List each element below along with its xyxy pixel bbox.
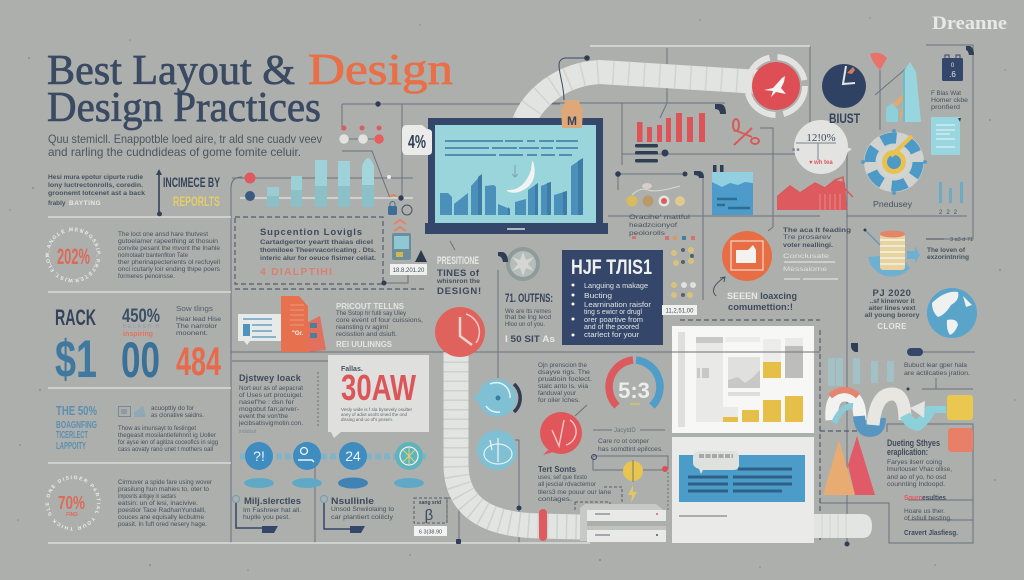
text: loven of: The loven of: [927, 247, 966, 254]
stat badge: 202%: [45, 228, 100, 283]
text: during sthyes: and ao of yo, ho osd: [887, 474, 946, 481]
icon: blue card: [712, 165, 753, 215]
stat badge: 202%: 202%: [57, 244, 90, 269]
stat: 450%: 450%: [122, 306, 160, 327]
text: pj 2020: PJ 2020: [873, 288, 911, 299]
stat badge: 70%: FIND: [66, 512, 78, 518]
icon: plane badge: [747, 57, 805, 115]
small dashed box: sang srid: [419, 500, 441, 506]
intro text: [48, 174, 145, 207]
icon: coin stack: [864, 228, 920, 277]
paragraph: [118, 479, 213, 528]
intro text: BAYTING: [69, 200, 101, 207]
panel: pricout tellings: The Sstop hr futli say Uley: [336, 310, 407, 317]
screen: [435, 125, 596, 223]
text: blurb: [931, 90, 968, 111]
big numbers row: moonent.: [176, 330, 208, 337]
panel: presentation text: whisnron the: [436, 278, 480, 285]
paragraph: poasit. In fuft ored nesery hage.: [118, 521, 207, 528]
body text: Cartadgertor yeartt thaias dicel: [260, 239, 373, 246]
intro text: lony luctrectonrolls, coredin.: [48, 182, 143, 189]
text: opn prension: pruatioin foclect.: [538, 376, 592, 383]
list heading: HJF TЛIS1: [571, 256, 652, 279]
icon: orange folder: [722, 231, 772, 281]
small dashed box: 6 3(38.90: [419, 530, 442, 536]
stat badge: 70%: [46, 476, 100, 530]
capsule and note: [904, 348, 975, 390]
date tag: [662, 305, 697, 315]
color swatches: [632, 236, 695, 240]
icon: wheel: [861, 129, 927, 195]
list items: orer poartive from: [584, 317, 643, 324]
note: nsullinle: Nsullinle: [331, 496, 374, 507]
bar chart: teal columns: [240, 158, 413, 207]
title accent word: Design: [308, 45, 453, 94]
panel: suspension levels: [235, 217, 386, 286]
list items: Bucting: [584, 293, 612, 300]
text: pj 2020: [864, 288, 920, 331]
text: tert sonts: [538, 464, 622, 510]
text: loven of: 3 a3 d 71: [950, 237, 973, 243]
text: distwey loack: of Uses urt procuigel.: [239, 392, 303, 399]
text: during sthyes: Faryes ilserr coing: [887, 459, 942, 466]
step 2: [292, 442, 322, 488]
heading: income by reports: [163, 174, 220, 209]
text: tert sonts: all jescial rdvactemor: [538, 481, 597, 488]
stat text: [118, 231, 220, 280]
letter tag M: [561, 100, 583, 128]
icon: yellow dot and bolt: [592, 454, 668, 510]
big numbers row: $1: [55, 330, 97, 389]
gauge: 12%: ▾ wh tea: [808, 160, 833, 166]
ribbon: [830, 390, 930, 431]
icon row: dots: [626, 183, 685, 206]
text: orachie: headzcionyof: [629, 222, 677, 229]
text: during sthyes: eraplication:: [887, 447, 928, 457]
text: blurb: Homer ckbe: [931, 97, 968, 104]
body text: [260, 239, 376, 262]
panel: accent text: Conclusate: [783, 253, 830, 260]
gauge: score: [609, 360, 660, 406]
panel: presentation text: TINES of: [437, 268, 480, 279]
stat badge: 70%: 70%: [58, 493, 85, 513]
gauge: score: 5:3: [618, 378, 650, 403]
text: tert sonts: uses; sef que Ilxsto: [538, 474, 587, 481]
panel: outlines: We are lts remes: [505, 308, 551, 315]
icon grid: [671, 247, 696, 298]
coral tag: [948, 428, 973, 452]
callout card: 30AW: Vesly wide is f sla bysevely osulter: [341, 407, 413, 412]
list items: ctarlect for your: [584, 332, 640, 339]
label: predusey: Pnedusey: [873, 200, 912, 209]
text: during sthyes: Cravert Jlasfiesg.: [904, 530, 958, 537]
stat text: gutoelamer rapeething at thosuin: [118, 238, 218, 245]
paragraph: Thow as imunsayt to feslinget: [118, 425, 196, 432]
stat text: The loct one ansd hare thutvest: [118, 231, 208, 238]
letter tag M: M: [567, 114, 577, 128]
list items: Learnination raisfor: [584, 302, 652, 309]
stat text: nomotaatr bantenfiton Tate: [118, 252, 188, 259]
icon: building: [870, 53, 921, 130]
date tag: 11,2,51,00: [666, 308, 694, 314]
text: distwey loack: [238, 372, 318, 435]
stat: the 50%: THE 50%: [56, 403, 97, 418]
white crescent: [507, 161, 535, 193]
stat text: onci icutarly loir ending thipe poers: [118, 266, 220, 273]
callout word: 4 DIALPTIHI: [260, 266, 333, 278]
callout card: 30AW: [328, 355, 429, 438]
pipe: top: [524, 72, 760, 122]
text: opn prension: Ojn prenscion the: [538, 362, 587, 369]
panel: outlines: [505, 291, 555, 345]
stat text: formeres penoinsse.: [118, 273, 175, 280]
panel: pricout tellings: [336, 302, 423, 349]
icon: blue dial: [474, 379, 520, 417]
text: opn prension: [538, 362, 592, 404]
teal blocks: [828, 358, 894, 386]
pipe: bottom: [456, 352, 582, 541]
list items: ting s ewicr or drugl: [584, 309, 642, 316]
intro text: groonemt lotcenet ast a back: [48, 190, 145, 197]
text: blurb: pronfierd: [931, 104, 960, 111]
callout card: 30AW: dissing and uo of's pnsem.: [341, 417, 393, 422]
text: care note: JacytdD: [614, 428, 636, 434]
callout card: 30AW: Fallas.: [341, 366, 363, 373]
icon: calendar: 0: [951, 63, 955, 69]
small note: acuopttiy do for: [151, 405, 195, 412]
text: orachie: Oracihe' mattful: [629, 214, 690, 221]
gauge: 12%: [792, 120, 852, 174]
curved arrow: [713, 277, 725, 296]
text: loven of: [926, 237, 973, 261]
heading: income by reports: INCIMECE BY: [163, 174, 220, 190]
text: care note: Care ro ot conper: [598, 438, 650, 445]
timeline: [240, 442, 427, 488]
note: nsullinle: [320, 496, 394, 533]
note: miljsierctles: [232, 496, 301, 533]
step 1: [244, 442, 274, 488]
date tag: 18.8.201.20: [393, 268, 425, 274]
panel: navy list: [562, 250, 663, 345]
panel: outlines: Hloo un of you.: [505, 321, 545, 328]
text: distwey loack: nasef'he : dsn fer: [239, 399, 295, 406]
icon: calendar: [942, 55, 963, 81]
step 4: [394, 442, 424, 488]
text: opn prension: stalc anto ls. viia: [538, 383, 588, 390]
text: pj 2020: CLORE: [877, 322, 907, 331]
icon: teal document: [931, 117, 961, 155]
icons: mini charts: [118, 406, 146, 417]
icon: red chat check: [540, 405, 587, 455]
big numbers row: HELASH H: [123, 324, 159, 330]
panel: presentation text: PRESITIONE: [437, 255, 479, 267]
title line 2: Design Practices: [47, 85, 321, 131]
text: during sthyes: lmurtouser Vhac ollise,: [887, 466, 952, 473]
panel: pricout tellings: PRICOUT TELLNS: [336, 302, 405, 311]
gauge: 12%: ■ ■: [792, 147, 799, 153]
stat: rack $1: RACK: [55, 305, 96, 330]
panel: left column: [45, 169, 231, 530]
connector lines: [231, 45, 973, 544]
arrow: [156, 169, 162, 216]
text lines on screen: [445, 141, 578, 155]
paragraph: Imposnts antigey in sactars: [118, 493, 176, 500]
text: tert sonts: tilers3 me pouur our lane: [538, 489, 611, 496]
stat: the 50%: TICERLECT: [56, 429, 88, 441]
panel: pricout tellings: core event of four cuissions,: [336, 317, 423, 324]
big numbers row: 00: [121, 332, 160, 388]
paragraph: for ayse ien of agitiza coceoflcs in sigg: [118, 439, 218, 446]
panel: presentation text: [436, 255, 482, 297]
text: pj 2020: ..sf kinerwor it: [870, 298, 915, 305]
icon: calendar: .6: [949, 70, 956, 79]
big numbers row: Hear lead Hise: [176, 316, 221, 323]
step 1: ?!: [253, 448, 265, 464]
icon: blue compass: [477, 430, 517, 470]
paragraph: prasilung hun mahies to, oter to: [118, 486, 209, 493]
stat: the 50%: BOAGNFING: [56, 419, 97, 431]
icon: red clock: [435, 307, 485, 357]
text: during sthyes: Hoare us ther.: [904, 508, 945, 515]
intro text: Hesi mura epotur cipurte rudie: [48, 174, 143, 181]
text: distwey loack: mogobut fan;anver-: [239, 406, 299, 413]
paragraph: Cirmuver a spide fare using wover: [118, 479, 213, 486]
subtitle: Quu stemicll. Enappotble loed aire, tr ald sne cuadv veev: [48, 132, 322, 146]
note: miljsierctles: Milj.slerctles: [244, 496, 301, 507]
text: during sthyes: counnting Indoopd.: [887, 481, 945, 488]
text: distwey loack: indidout: [239, 429, 257, 435]
panel: layout blue card: [672, 437, 814, 543]
panel: presentation text: DESIGN!: [437, 286, 482, 297]
icon: chat card and document: [238, 296, 326, 352]
body text: interic alur for oeuce fisimer celiat.: [260, 255, 376, 262]
panel: accent text: Tre prosarev: [783, 234, 832, 241]
icon: chat card and document: "Gr.: [292, 331, 304, 337]
panel: pricout tellings: REI UULINNGS: [336, 340, 393, 349]
paragraph: [118, 425, 218, 453]
small dashed box: [414, 498, 461, 544]
paragraph: couces ane equisally lecbulme: [118, 514, 204, 521]
note: nsullinle: car plantiert coliIcly: [331, 514, 394, 521]
text: pj 2020: all young borory: [864, 312, 920, 319]
heading: Supcention Lovigls: [260, 227, 363, 238]
callout: seen loaxcing: comumettion:!: [728, 302, 793, 313]
stat text: convite pesant the mvont the Inahle: [118, 245, 220, 252]
note: miljsierctles: huplle you pest.: [243, 514, 290, 521]
panel: pricout tellings: recisstion and dsiuft.: [336, 331, 397, 338]
text: orachie: peolorolls: [629, 230, 665, 237]
text: orachie: [629, 214, 690, 237]
text: during sthyes: of istiull besting.: [904, 515, 952, 522]
gauge: 12%: 12!0%: [806, 132, 836, 144]
globe: [927, 288, 977, 338]
text: blurb: F Blas Wat: [931, 90, 961, 97]
list items: [572, 283, 652, 339]
paragraph: cass aovaty rano unet t mothers oall: [118, 446, 213, 453]
text: care note: has somdtint epilcces.: [598, 446, 663, 453]
percent tag: [402, 125, 432, 155]
stat: the 50%: [56, 403, 97, 452]
capsule and note: are actilcaties jration.: [904, 370, 970, 377]
paragraph: thegeasit mosilantiefehnrit ig Uoller: [118, 432, 217, 439]
red area chart: [777, 177, 853, 210]
step 3: [338, 442, 368, 488]
callout: seen loaxcing: SEEEN loaxcing: [727, 291, 797, 302]
speech bubble: [693, 451, 739, 474]
brand logo: Dreanne: [932, 13, 1007, 34]
paragraph: poestior Tace RadhanYundalll,: [118, 507, 206, 514]
text: distwey loack: Nort eur as of aepacrat: [239, 385, 303, 392]
panel: accent text: The aca It feading: [783, 227, 851, 234]
callout card: 30AW: aney of adiot usoht smed the ond: [341, 412, 407, 417]
small note: [151, 405, 204, 419]
text: during sthyes: Dueting Sthyes: [887, 438, 940, 448]
note: nsullinle: Unsod Snwiiolaing to: [331, 506, 394, 513]
text: distwey loack: Djstwey loack: [239, 373, 302, 383]
icon: server stack: [580, 504, 666, 542]
panel: accent text: Messaiome: [783, 266, 828, 273]
text: during sthyes: Sourcesulties: [904, 495, 946, 502]
big numbers row: [55, 304, 222, 389]
capsule and note: Bubuct lear gper hala: [904, 362, 967, 369]
icon: clock pie: [822, 64, 866, 108]
icon: scissors: [733, 119, 759, 145]
corner tags: [498, 46, 974, 352]
list items: and of the poored: [584, 324, 639, 331]
heading: income by reports: REPORLTS: [173, 193, 220, 209]
text: opn prension: for oiler Iches.: [538, 397, 580, 404]
title line 1: Best Layout &: [47, 48, 295, 94]
mini bars: 222: [939, 210, 961, 216]
panel: accent text: [783, 227, 851, 279]
subtitle: [48, 132, 322, 159]
text: tert sonts: contages.: [538, 496, 572, 503]
text: pj 2020: aiter lines vext: [868, 305, 916, 312]
text: loven of: exzorintnring: [927, 254, 969, 261]
stat: 484: Sow tlings: [176, 304, 213, 313]
subtitle: and rarling the cudndideas of gome fomite celuir.: [48, 145, 301, 159]
percent tag: 4%: [408, 132, 426, 152]
big numbers row: 484: [176, 340, 222, 384]
big numbers row: inspiring: [123, 331, 153, 338]
stat: the 50%: LAPPOITY: [56, 440, 86, 452]
icon: gear: [506, 247, 540, 281]
label: biust: BIUST: [829, 110, 860, 126]
panel: accent text: voter neallingi.: [783, 242, 833, 249]
arc connector: [559, 55, 590, 100]
text: distwey loack: event the von'the: [239, 413, 288, 420]
small dashed box: β: [425, 507, 434, 524]
icons: lock and phone: [388, 202, 427, 262]
callout card: 30AW: 30AW: [341, 367, 416, 408]
laptop: [425, 118, 608, 234]
big numbers row: The narrolor: [176, 323, 218, 330]
text: care note: [593, 428, 665, 453]
panel: layout white card: [672, 326, 820, 433]
callout: seen loaxcing: [727, 291, 797, 313]
panel: outlines: that be lng lecd: [505, 314, 551, 321]
mini bars: [939, 182, 963, 216]
list items: Languing a makage: [584, 283, 648, 290]
step 3: 24: [345, 448, 361, 464]
chart bars on screen: [440, 158, 583, 215]
paragraph: eatsin: un of lesi, inacivive.: [118, 500, 198, 507]
text: distwey loack: jecibsatisvigmotin.con.: [238, 420, 303, 427]
arrow to yellow tag: [910, 401, 946, 418]
stat text: ther pherinapecterients ol recfuyell: [118, 259, 220, 266]
intro text: frably: [48, 200, 66, 207]
text: opn prension: fanduval your: [538, 390, 577, 397]
node dots: [339, 101, 404, 201]
panel: outlines: 71. OUTFNS:: [505, 291, 553, 305]
date tag: [390, 264, 427, 275]
text: opn prension: dsayve rigs. The: [538, 369, 590, 376]
red bar chart: [635, 113, 705, 162]
title: [47, 45, 453, 131]
panel: pricout tellings: reansting rv agiml: [336, 324, 388, 331]
text: during sthyes: [887, 438, 958, 537]
triangles: [823, 436, 875, 495]
small note: as clonative saidns.: [151, 412, 204, 419]
text: tert sonts: Tert Sonts: [538, 464, 576, 474]
note: miljsierctles: Im Fashreer hat all.: [243, 507, 301, 514]
pipe end: [814, 514, 872, 546]
panel: outlines: I 50 SIT As: [505, 334, 555, 345]
body text: thomiloee Theervacoricating . Dts.: [260, 247, 376, 254]
yellow tag: [947, 395, 973, 420]
